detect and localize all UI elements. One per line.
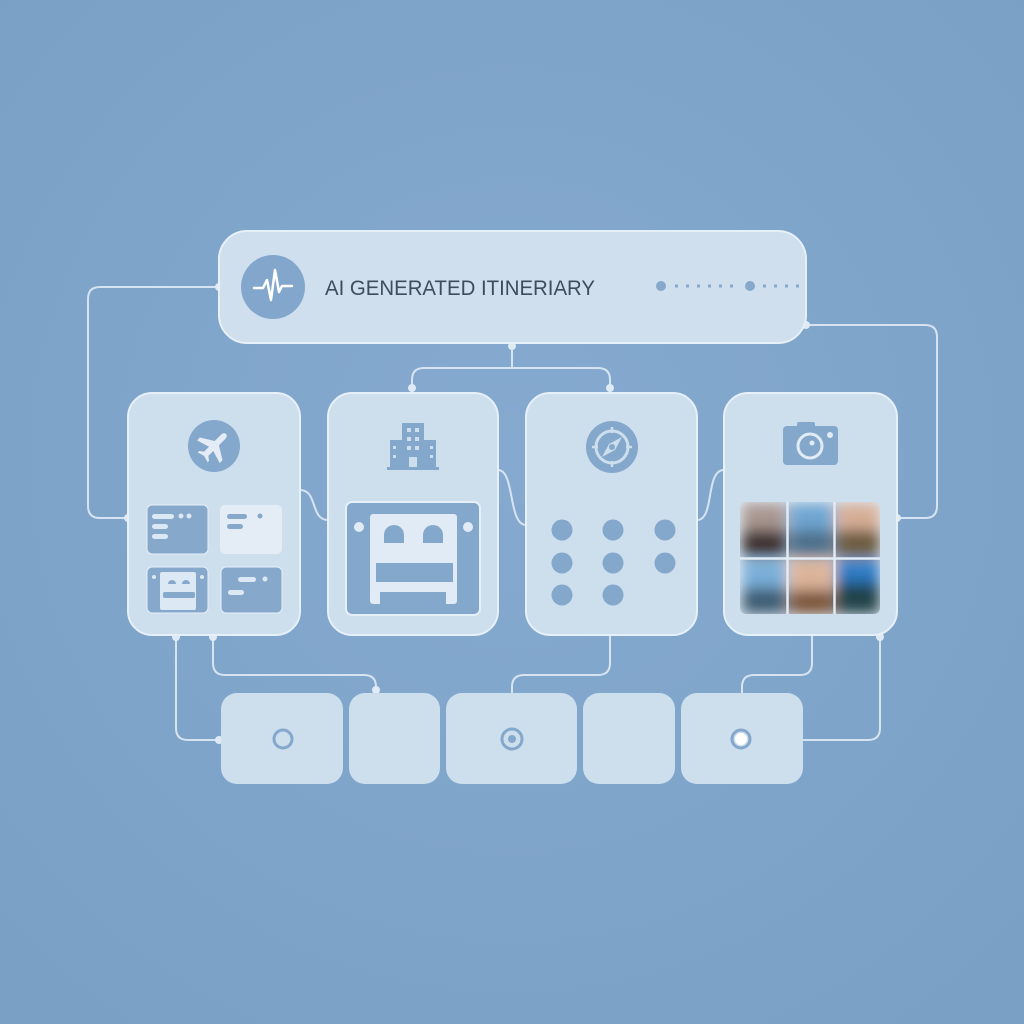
timeline boxes <box>221 693 803 784</box>
icon: plane <box>188 420 240 472</box>
icon: pulse <box>241 255 305 319</box>
infographic canvas <box>87 230 938 784</box>
photo grid <box>738 500 882 616</box>
header panel <box>219 231 806 343</box>
connectors <box>88 287 937 740</box>
icon: building <box>387 423 439 470</box>
progress dots <box>656 281 799 291</box>
icon: camera <box>783 422 838 465</box>
sub-cards <box>147 505 282 613</box>
activity dots <box>552 520 676 606</box>
icon: compass <box>586 421 638 473</box>
panel: flights <box>128 393 300 635</box>
panel: explore <box>526 393 697 635</box>
markers <box>274 730 292 748</box>
title: AI GENERATED ITINERIARY <box>325 277 595 300</box>
panel: photos <box>724 393 897 635</box>
panel: hotel <box>328 393 498 635</box>
bed illustration <box>346 502 480 615</box>
